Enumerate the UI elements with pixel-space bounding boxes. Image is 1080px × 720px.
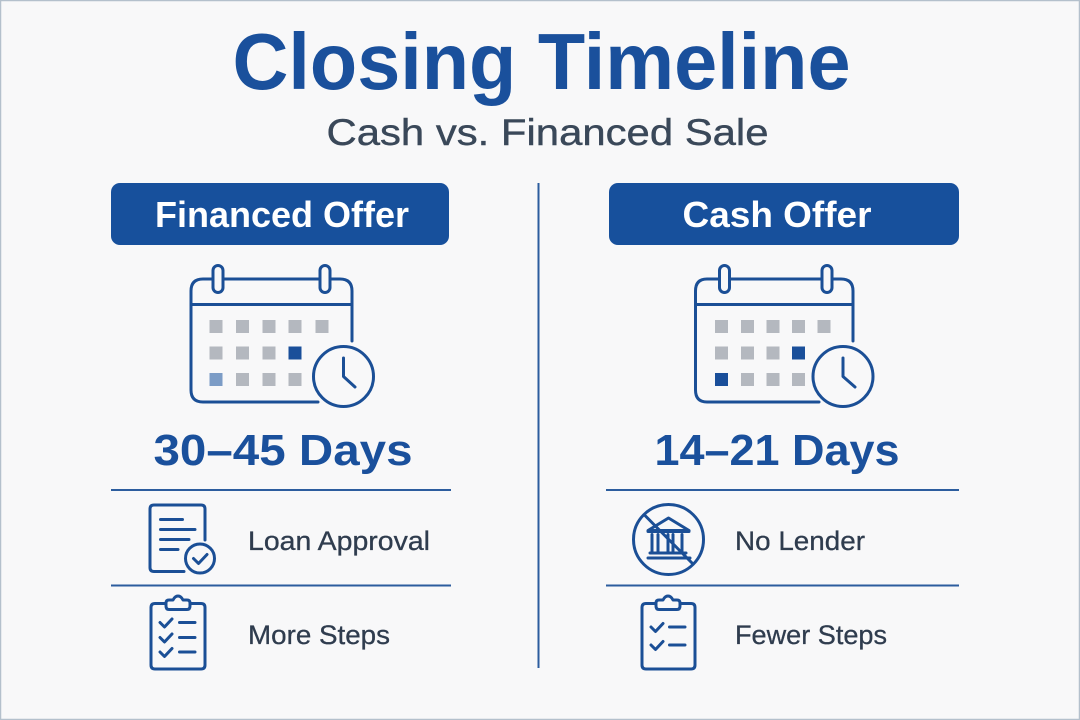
center divider [538,183,540,668]
label: fewer steps: Fewer Steps [735,620,887,650]
duration: 14-21 days: 14–21 Days [654,426,900,475]
heading: financed offer [111,183,449,245]
row: more steps [151,596,390,669]
label: more steps: More Steps [248,620,390,650]
panel: cash offer [609,183,959,669]
row: no lender [634,504,865,574]
heading: cash offer [609,183,959,245]
heading: financed offer: Financed Offer [155,194,409,235]
icon: calendar with clock [696,266,873,406]
icon: clipboard with three checks [151,596,205,669]
label: loan approval: Loan Approval [248,526,430,556]
icon: calendar with clock [191,266,374,406]
subtitle: Cash vs. Financed Sale [326,112,768,153]
row: loan approval [150,505,430,573]
row: fewer steps [642,596,887,669]
heading: cash offer: Cash Offer [682,194,872,235]
label: no lender: No Lender [735,526,865,556]
panel: financed offer [111,183,449,669]
icon: crossed-out bank [634,504,704,574]
icon: approved document [150,505,214,573]
title: Closing Timeline [232,17,850,106]
icon: clipboard with two checks [642,596,695,669]
duration: 30-45 days: 30–45 Days [154,426,412,475]
